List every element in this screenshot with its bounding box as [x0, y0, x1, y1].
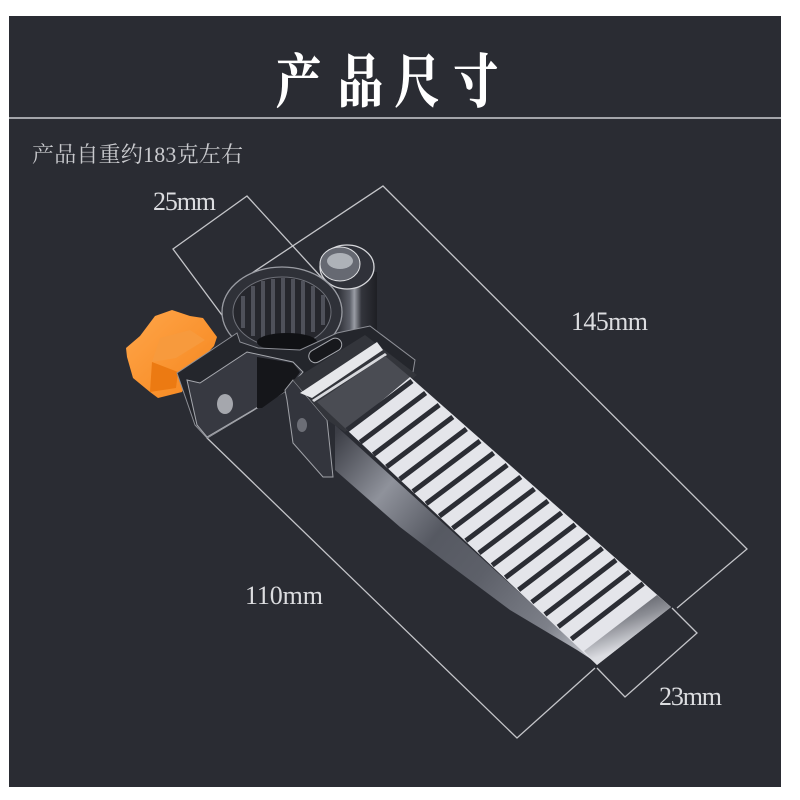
ribbed plate — [347, 377, 671, 665]
dimension bracket: 110mm — [207, 390, 595, 738]
dimension bracket: 23mm — [597, 608, 697, 697]
plate mount with screw — [285, 380, 333, 477]
plate tip — [584, 595, 671, 665]
weight note: 产品自重约183克左右 — [32, 142, 243, 167]
grooves — [347, 381, 643, 639]
label: 25mm: 25mm — [153, 187, 216, 216]
dimension lines — [173, 186, 747, 738]
orange knob — [126, 310, 217, 398]
clear blade under plate — [335, 425, 597, 663]
clamp lower bracket — [177, 326, 415, 438]
title: 产品尺寸 — [276, 51, 498, 115]
dimension bracket: 145mm — [252, 186, 747, 608]
label: 110mm: 110mm — [245, 581, 323, 610]
product: clamp with ribbed metal plate — [126, 245, 671, 665]
clear post with lens top — [320, 245, 377, 342]
label: 145mm: 145mm — [571, 307, 648, 336]
clamp ring — [222, 267, 342, 357]
plate head — [293, 335, 417, 432]
rib base — [347, 377, 671, 665]
label: 23mm: 23mm — [659, 682, 722, 711]
title divider — [9, 117, 781, 119]
dimension labels — [153, 187, 722, 711]
dimension bracket: 25mm — [173, 196, 333, 330]
